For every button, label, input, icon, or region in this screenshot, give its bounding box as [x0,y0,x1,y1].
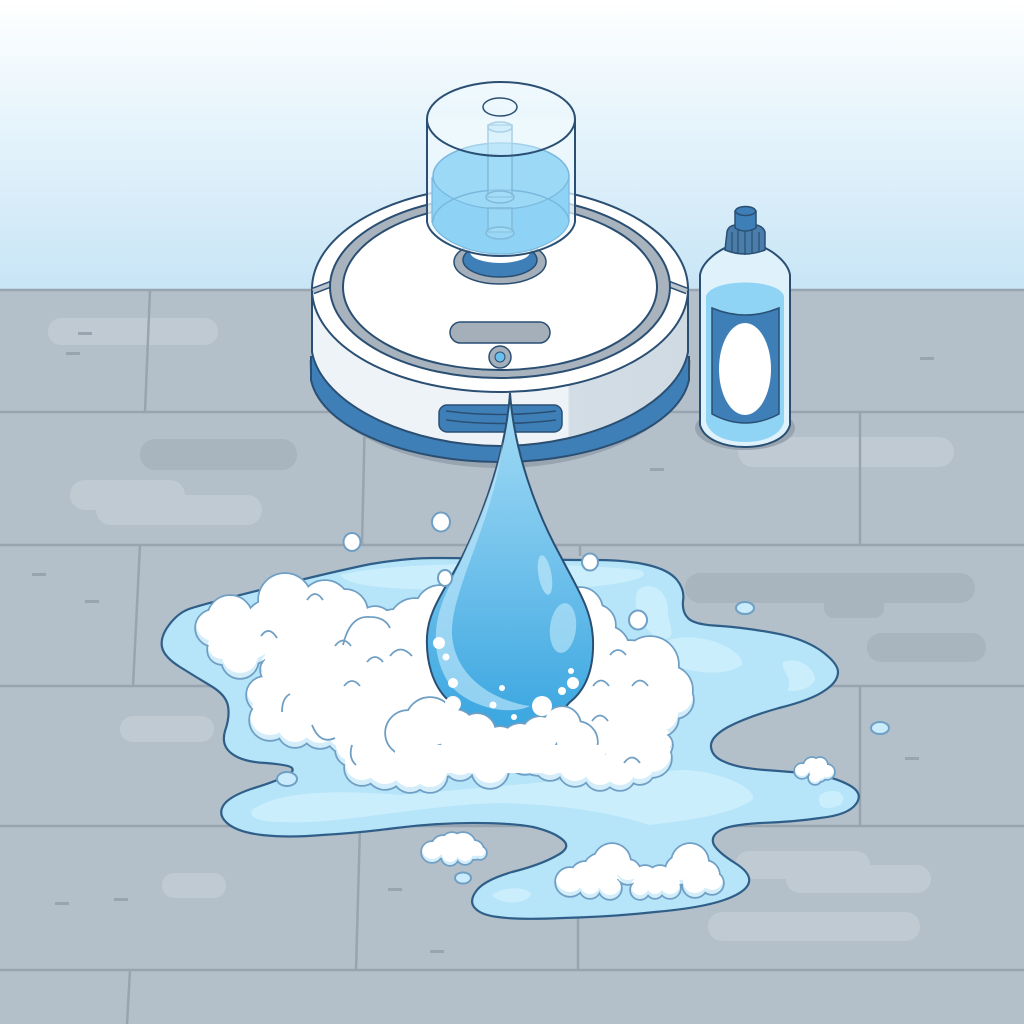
power button [489,346,511,368]
tank inner tube [486,122,514,239]
ring connectors [313,283,687,291]
robot vacuum [309,186,691,468]
drop highlights [436,440,530,710]
display slot [450,322,550,343]
robot floor shadow [309,360,691,468]
water drop [427,393,593,728]
tank dock [454,240,546,284]
water tank [427,82,575,256]
detergent bottle [695,206,795,450]
tank body [427,119,575,256]
foam in front of drop [386,696,605,773]
bottle shadow [695,406,795,450]
drop bubbles [433,637,579,720]
background: sky wall [0,0,1024,290]
tank water [432,177,569,254]
foam curl details [261,594,648,765]
water puddle [162,558,859,919]
grey ring outer [330,196,670,378]
bottle liquid [706,282,784,442]
bottle body [700,246,790,447]
front vent [439,405,562,432]
floating bubbles [277,512,889,884]
robot top shell [312,186,688,392]
robot side wall [312,288,688,446]
label oval [719,323,771,415]
bottle cap [725,206,765,255]
robot blue base [311,357,689,462]
ring inner panel [343,204,657,370]
tiled floor [0,290,1024,1024]
bottle label [712,308,779,423]
main foam mass [196,569,693,792]
tank top [427,82,575,156]
puddle light patches [251,564,843,902]
small foam clumps [422,830,486,865]
